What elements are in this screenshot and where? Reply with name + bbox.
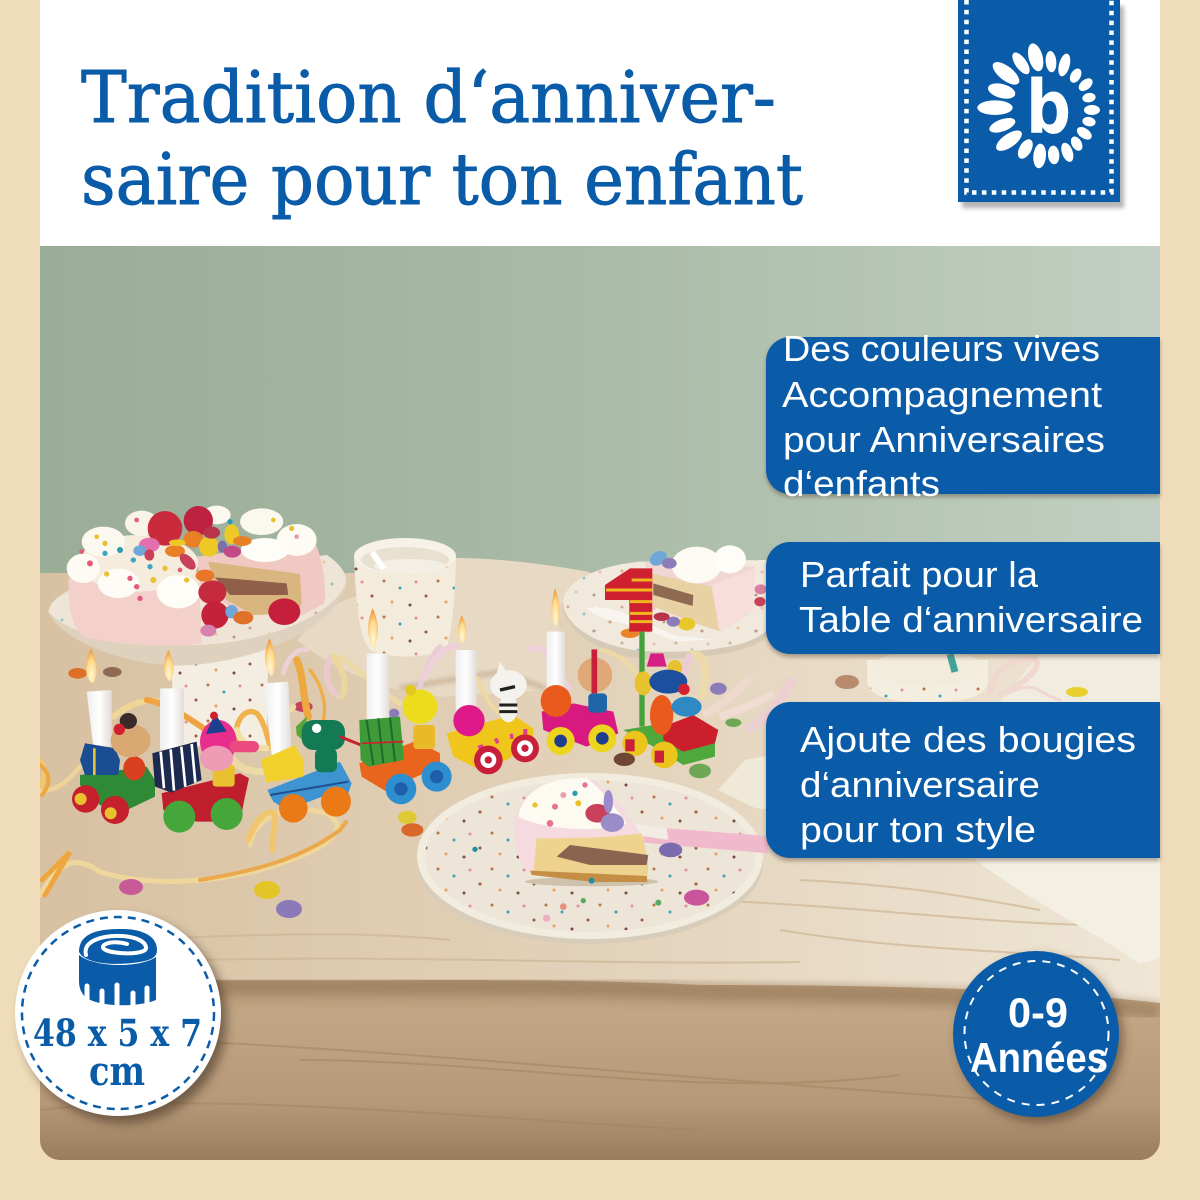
train 4: giraffe: [359, 608, 452, 804]
number one: [605, 568, 652, 632]
candle 3: [264, 638, 292, 755]
front slice and sweets: [398, 778, 768, 922]
cake body: [67, 506, 325, 645]
napkin upper right: [1000, 654, 1160, 702]
cloth under cup: [297, 558, 590, 697]
logo letter: b: [1026, 65, 1071, 151]
ribbons near right cup: [990, 659, 1060, 700]
size text: 48 x 5 x 7: [33, 1011, 202, 1055]
callout 1: [766, 328, 1160, 504]
number one candle stick: [639, 632, 645, 727]
icon: flower petals: [977, 42, 1100, 169]
candies on table left: [68, 667, 399, 718]
wall: [40, 246, 1160, 586]
callout 1: d‘enfants: [783, 463, 940, 504]
candle 4: [367, 608, 389, 723]
photo scene: [40, 246, 1160, 1160]
icon: measuring tape: [79, 929, 157, 1012]
callout 1: Des couleurs vives: [783, 328, 1100, 369]
cup: [354, 538, 456, 657]
candle 6: [547, 588, 565, 692]
size text: cm: [89, 1048, 145, 1095]
front plate: [417, 773, 763, 944]
back cake slice: [621, 545, 767, 638]
candies near trains: [614, 683, 741, 778]
stand and big cake: [40, 506, 440, 793]
age badge: Années: [970, 1034, 1108, 1081]
train 5: zebra: [447, 615, 539, 774]
napkin near plate: [718, 756, 766, 810]
callout 3: d‘anniversaire: [800, 764, 1040, 805]
title: saire pour ton enfant: [81, 138, 803, 221]
candle 2: [160, 650, 184, 750]
age badge: 0-9: [1008, 989, 1068, 1036]
spoon on back plate: [587, 607, 713, 642]
train 6: clown: [541, 588, 618, 755]
ribbons behind trains: [40, 647, 440, 793]
spoon: [630, 823, 768, 853]
size text: [33, 1011, 202, 1095]
title: Tradition d‘anniver-: [81, 56, 776, 139]
header panel: [40, 0, 1160, 246]
callout 3: pour ton style: [800, 809, 1036, 850]
title: [81, 56, 803, 221]
cup right: [867, 650, 988, 702]
sweets on cake: [133, 506, 300, 637]
stand foot: [172, 647, 268, 747]
front ribbon: [40, 765, 346, 895]
callout 2: Parfait pour la: [800, 554, 1039, 595]
callout 2: [766, 542, 1160, 657]
trains right: [423, 568, 793, 778]
train 7: mouse: [622, 653, 718, 768]
train 2: bird: [152, 650, 253, 833]
candle 1: [86, 648, 112, 747]
train 1: monkey: [72, 648, 155, 824]
table front edge: [40, 977, 1160, 1160]
age badge: [953, 951, 1123, 1122]
size badge: [15, 910, 227, 1123]
table top: [40, 573, 1160, 1010]
callout 2: Table d‘anniversaire: [799, 599, 1143, 640]
sprinkles: [79, 518, 299, 601]
back plate and cake: [563, 545, 767, 659]
candle 5: [456, 615, 477, 712]
candies on table: [119, 675, 1088, 918]
napkin right: [973, 858, 1160, 964]
train 3: dino: [261, 638, 365, 823]
trains left: [72, 608, 452, 833]
callout 3: [766, 702, 1160, 861]
callout 3: Ajoute des bougies: [800, 719, 1136, 760]
stand plate: [48, 555, 347, 666]
ribbons right of trains: [423, 646, 793, 730]
logo tag: [958, 0, 1124, 208]
callout 1: pour Anniversaires: [783, 419, 1105, 460]
callout 1: Accompagnement: [782, 374, 1102, 415]
